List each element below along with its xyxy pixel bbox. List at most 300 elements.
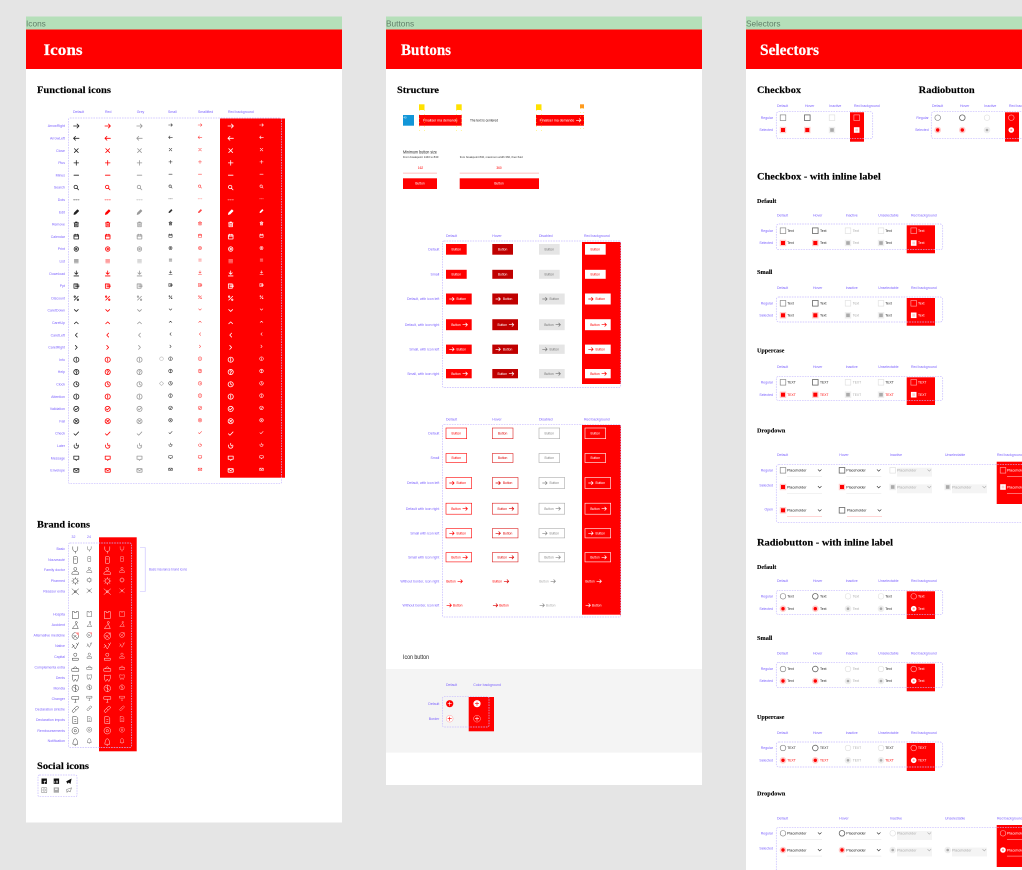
structure button: centered label — [419, 115, 462, 126]
section: radio uppercase — [757, 715, 943, 771]
brand icon column: 24 — [86, 546, 92, 743]
row: small with icon left: Button — [550, 348, 559, 352]
dashed boundary — [776, 590, 943, 615]
header band: Buttons — [386, 30, 702, 69]
red background: icon button — [469, 697, 494, 731]
row: regular: Regular — [761, 468, 774, 472]
red background — [1005, 112, 1019, 142]
panel body — [386, 69, 702, 785]
frame label bar: Buttons — [386, 16, 702, 30]
subheading: Dropdown — [757, 792, 786, 798]
column headers — [777, 214, 937, 218]
row: regular: Placeholder — [897, 469, 917, 473]
column headers: Inactive — [846, 286, 858, 290]
row: selected: Selected — [759, 484, 773, 488]
row labels: brand icons: Accident — [52, 623, 65, 627]
icon column: small — [169, 124, 172, 471]
column headers: functional icons: Red — [105, 110, 111, 114]
row labels: functional icons: Later — [57, 444, 66, 448]
row: selected: Placeholder — [952, 848, 972, 852]
row: regular: TEXT — [918, 746, 926, 750]
column headers — [777, 652, 937, 656]
row: regular: Text — [820, 594, 826, 598]
column headers: functional icons: Default — [73, 110, 84, 114]
row: selected: Placeholder — [952, 485, 972, 489]
dashed boundary: icon button — [442, 697, 489, 727]
icon: small clock variant — [159, 381, 164, 386]
row labels: brand icons — [33, 547, 66, 743]
column headers: Disabled — [539, 418, 553, 422]
padding marker: blue — [403, 115, 414, 126]
row labels: brand icons: Alternative medicine — [33, 634, 65, 638]
row: regular: Text — [820, 302, 826, 306]
column headers: Unselectable — [945, 453, 965, 457]
column headers — [777, 104, 880, 108]
row: small: Button — [452, 272, 461, 276]
row labels: brand icons: Notification — [48, 739, 65, 743]
row: small: Small — [431, 456, 440, 460]
dashed boundary — [776, 112, 873, 139]
row labels: brand icons: Hospita — [53, 612, 65, 616]
row: open: Placeholder — [787, 509, 807, 513]
row: regular: Text — [787, 667, 794, 671]
text: breakpoint note right: from breakpoint 840, maximum width 360, then fluid — [460, 155, 523, 159]
header band: Buttons: Buttons — [401, 42, 451, 59]
row: default with icon right: Default, with icon right — [405, 323, 439, 327]
row labels: functional icons: List — [60, 260, 65, 264]
column headers: Red background — [911, 731, 937, 735]
dashed boundary — [442, 241, 621, 388]
column headers: Hover — [839, 453, 849, 457]
row: selected: Placeholder — [846, 485, 867, 489]
column headers: Inactive — [846, 652, 858, 656]
red background — [907, 377, 935, 405]
row labels: icon button — [428, 702, 440, 721]
row: selected: TEXT — [918, 758, 926, 762]
row labels: functional icons — [47, 124, 66, 473]
column headers: functional icons: Smallified — [198, 110, 213, 114]
padding marker: blue: 40 — [404, 116, 407, 120]
row: selected: Placeholder — [897, 485, 917, 489]
row: without border, icon right: Button — [493, 580, 502, 584]
row: selected: Placeholder — [897, 848, 917, 852]
icon: small info variant — [160, 357, 163, 361]
row: default: Button — [545, 248, 554, 252]
row labels: brand icons: Mondia — [54, 686, 65, 690]
row: selected — [759, 312, 924, 318]
row labels: icon button: Default — [428, 702, 439, 706]
dashed boundary — [776, 662, 943, 688]
panel: buttons — [386, 16, 702, 785]
heading: Radiobutton with inline label: Radiobutton - with inline label — [757, 537, 893, 548]
column headers: Red background — [854, 104, 880, 108]
icon: send — [66, 778, 72, 784]
column headers — [777, 731, 937, 735]
row: regular: Text — [918, 302, 924, 306]
row: without border, icon left: Button — [546, 604, 556, 608]
row: selected: Text — [885, 679, 892, 683]
row labels: functional icons: Info — [59, 358, 65, 362]
icon column: default — [74, 124, 79, 472]
row labels: brand icons: Basic — [56, 547, 65, 551]
row: default: Button — [498, 248, 508, 252]
icon: social square — [54, 787, 59, 793]
row: selected: Text — [885, 607, 892, 611]
row: regular: Placeholder — [846, 469, 867, 473]
red background column — [582, 425, 621, 615]
row: default with icon right: Button — [590, 507, 600, 511]
row: default with icon left — [407, 294, 611, 304]
column headers — [446, 234, 610, 238]
row: small with icon left: Small, with icon left — [409, 348, 439, 352]
header band: Icons — [26, 30, 342, 69]
icon: bird — [67, 788, 72, 792]
row: small with icon right: Button — [590, 372, 600, 376]
column headers: Red background — [584, 418, 610, 422]
column headers — [777, 579, 937, 583]
row labels: brand icons: Réassur extra — [43, 590, 65, 594]
row: small with icon right: Button — [451, 556, 461, 560]
dashed component boundary — [68, 118, 282, 484]
row: small with icon left — [410, 529, 611, 538]
table: outlined buttons — [400, 418, 621, 617]
heading: Checkbox — [757, 85, 801, 96]
row: without border, icon right — [400, 580, 601, 584]
row labels: functional icons: Dots — [58, 198, 65, 202]
column headers: Default — [932, 104, 943, 108]
row: regular: Text — [918, 594, 924, 598]
row: selected: TEXT — [787, 393, 796, 397]
minimum size: 360: 360 — [496, 166, 502, 170]
row: selected: Selected — [759, 679, 773, 683]
column headers: Inactive — [846, 365, 858, 369]
section: radio default — [757, 565, 943, 619]
row: selected — [759, 392, 926, 398]
row: regular: Regular — [761, 594, 774, 598]
row: default with icon left: Button — [457, 481, 466, 485]
row: default with icon left: Button — [503, 481, 513, 485]
row: small with icon right: Button — [590, 556, 600, 560]
row: regular — [761, 666, 924, 672]
column headers: Default — [777, 365, 788, 369]
column headers: Hover — [492, 234, 502, 238]
column headers: Default — [777, 104, 788, 108]
column headers — [777, 816, 1022, 820]
text: breakpoint note left: From breakpoint 1440 to 840: — [403, 155, 439, 159]
bracket: basic insurance group — [140, 548, 145, 592]
column headers — [777, 286, 937, 290]
band: icon button background — [386, 669, 702, 753]
row labels: functional icons: Search — [54, 186, 65, 190]
row: selected: Selected — [915, 128, 929, 132]
row labels: functional icons: CaretUp — [52, 321, 65, 325]
row: small with icon right — [407, 369, 611, 378]
row: small — [431, 454, 606, 462]
row: selected: Text — [787, 314, 794, 318]
column headers — [777, 365, 937, 369]
row: selected: TEXT — [820, 758, 828, 762]
red background column: brand — [99, 537, 137, 751]
row labels: functional icons: Clock — [56, 382, 65, 386]
dashed boundary — [776, 742, 943, 767]
column headers — [446, 418, 610, 422]
panel: icons — [26, 16, 342, 822]
row: regular: Regular — [761, 746, 774, 750]
row: small with icon left: Button — [457, 348, 466, 352]
column headers: Default — [777, 453, 788, 457]
row: regular: Text — [853, 302, 859, 306]
row: small: Button — [591, 456, 600, 460]
row: regular: Text — [820, 667, 826, 671]
column headers: Red background — [911, 365, 937, 369]
column headers: Hover — [813, 286, 823, 290]
dashed boundary — [931, 112, 1022, 139]
subheading: Default — [757, 199, 776, 205]
row: small with icon left: Small with icon left — [410, 532, 439, 536]
section: radiobutton — [915, 85, 1022, 142]
row: small with icon right: Button — [498, 556, 507, 560]
column headers: icon button: Color background — [473, 683, 501, 687]
row: default with icon right: Button — [544, 507, 554, 511]
row: small: Button — [591, 272, 600, 276]
row: regular: TEXT — [853, 746, 861, 750]
padding markers: yellow and orange — [536, 104, 584, 131]
row: default: Default — [428, 432, 439, 436]
row: regular — [761, 594, 924, 599]
section: checkbox small — [757, 270, 943, 326]
row: selected: Selected — [759, 758, 773, 762]
row labels: functional icons: ArrowLeft — [50, 136, 65, 140]
row labels: functional icons: Calendar — [51, 235, 66, 239]
heading: Brand icons: Brand icons — [37, 519, 90, 530]
column headers: Hover — [805, 104, 815, 108]
row: default with icon right: Button — [498, 507, 507, 511]
row: selected: Placeholder — [787, 485, 807, 489]
row labels: functional icons: Print — [58, 247, 65, 251]
column headers: Inactive — [890, 816, 902, 820]
header band: Icons: Icons — [44, 42, 82, 59]
row labels: functional icons: Fail — [59, 419, 65, 423]
row: regular: TEXT — [787, 380, 796, 384]
row: default — [428, 428, 606, 439]
row: small with icon right: Button — [498, 372, 507, 376]
subheading: Uppercase — [757, 349, 785, 355]
section: checkbox dropdown — [757, 428, 1022, 523]
row labels: functional icons: Message — [51, 456, 65, 460]
row: small: Button — [498, 272, 508, 276]
column headers: Hover — [813, 365, 823, 369]
row: without border, icon right: Button — [539, 580, 549, 584]
row: regular: Text — [885, 302, 892, 306]
row: selected: Text — [787, 679, 794, 683]
row: selected — [759, 846, 1022, 856]
row: small with icon right: Small with icon right — [408, 556, 439, 560]
column headers: Red background — [997, 816, 1022, 820]
column headers: Inactive — [890, 453, 902, 457]
column headers: Hover — [813, 652, 823, 656]
panel body — [26, 69, 342, 822]
row: regular: TEXT — [918, 380, 926, 384]
row: small with icon right: Button — [451, 372, 461, 376]
structure button: centered label: Finaliser ma demande — [423, 118, 458, 122]
column headers: functional icons: Small — [168, 110, 177, 114]
row: selected: Text — [918, 679, 924, 683]
row: small with icon right: Button — [544, 372, 554, 376]
row: regular: Regular — [761, 229, 774, 233]
row: selected: Text — [918, 241, 924, 245]
row: regular: Regular — [761, 667, 774, 671]
column headers: Red background — [911, 579, 937, 583]
row: selected: Selected — [759, 607, 773, 611]
column headers: Inactive — [846, 214, 858, 218]
row: selected: Selected — [759, 846, 773, 850]
red background — [997, 462, 1022, 504]
heading: Checkbox with inline label: Checkbox - with inline label — [757, 171, 881, 182]
row: regular: Text — [885, 229, 892, 233]
row: default with icon right: Button — [451, 507, 461, 511]
header band: Selectors — [746, 30, 1022, 69]
column headers — [932, 104, 1022, 108]
dashed boundary — [776, 465, 1022, 523]
row: selected: Text — [918, 314, 924, 318]
row: open: Placeholder — [847, 509, 867, 513]
row labels: brand icons: Dents — [56, 676, 65, 680]
row labels: functional icons: Download — [49, 272, 65, 276]
brand icon column: 32 — [72, 546, 79, 745]
row: regular: Text — [853, 229, 859, 233]
row: selected: TEXT — [853, 758, 861, 762]
row: open: Open — [764, 508, 773, 512]
row: default with icon right — [406, 503, 611, 514]
icon button: default on red — [473, 700, 481, 707]
red background — [997, 825, 1022, 867]
minimum size: 360 — [460, 166, 539, 189]
icon button: default — [446, 700, 453, 707]
row: open — [764, 507, 882, 517]
row: regular: Text — [885, 667, 892, 671]
row labels: brand icons: Declaration sinistre — [35, 708, 65, 712]
frame label bar: Selectors — [746, 16, 1022, 30]
row: selected: Text — [820, 607, 826, 611]
row: default: Button — [452, 432, 461, 436]
row labels: functional icons: CaretLeft — [51, 333, 65, 337]
row labels: brand icons: Capital — [54, 655, 65, 659]
column headers: Hover — [960, 104, 970, 108]
panel body — [746, 69, 1022, 870]
heading: Radiobutton — [919, 85, 975, 96]
row: regular: Text — [787, 594, 794, 598]
dashed boundary — [442, 424, 621, 617]
row labels: functional icons: Discount — [51, 296, 65, 300]
row: regular: Text — [787, 229, 794, 233]
column headers: Hover — [492, 418, 502, 422]
row: without border, icon left — [403, 604, 602, 608]
row: regular: Placeholder — [846, 832, 867, 836]
row: default: Button — [498, 432, 508, 436]
column headers: icon button: Default — [446, 683, 457, 687]
icon: linkedin — [54, 778, 59, 784]
row labels: functional icons: Validation — [50, 407, 65, 411]
section: radio small — [757, 636, 943, 691]
row: selected — [759, 678, 924, 684]
row: selected: TEXT — [885, 393, 894, 397]
row: small with icon right — [408, 553, 611, 562]
column headers: Unselectable — [878, 652, 899, 656]
row: selected — [759, 757, 926, 764]
icon button: border — [446, 715, 453, 722]
dashed boundary: social icons — [38, 775, 77, 797]
row: small: Button — [452, 456, 461, 460]
padding markers: yellow pair — [419, 104, 462, 131]
row labels: brand icons: Declaration impots — [36, 718, 65, 722]
column headers: Inactive — [984, 104, 996, 108]
row labels: functional icons: ArrowRight — [48, 124, 65, 128]
icon: facebook — [42, 778, 47, 784]
row: selected: Text — [853, 679, 859, 683]
row: selected: Placeholder — [787, 848, 807, 852]
icon column: red — [105, 124, 110, 472]
row: selected: Text — [787, 241, 794, 245]
red background — [907, 664, 935, 691]
column headers: Red background — [911, 286, 937, 290]
column headers: Default — [777, 652, 788, 656]
row labels: functional icons: CaretDown — [47, 309, 65, 313]
row: default — [428, 244, 606, 255]
column headers: functional icons: Red background — [228, 110, 254, 114]
row: regular: Text — [918, 667, 924, 671]
column headers: Hover — [813, 214, 823, 218]
row: small: Small — [431, 272, 440, 276]
table: filled buttons — [405, 234, 621, 388]
row: regular: Text — [853, 594, 859, 598]
section: radio dropdown — [757, 792, 1022, 870]
frame label bar: Buttons: Buttons — [386, 19, 414, 29]
row: regular — [761, 380, 926, 385]
heading: Functional icons: Functional icons — [37, 85, 111, 96]
minimum size: 162 — [403, 166, 437, 189]
column headers: Unselectable — [878, 214, 899, 218]
column headers: Hover — [839, 816, 849, 820]
column headers: brand icons: 24 — [87, 535, 91, 539]
row: default with icon left: Default, with icon left — [407, 297, 439, 301]
panel: selectors — [746, 16, 1022, 870]
column headers: Unselectable — [878, 365, 899, 369]
row labels: functional icons: CaretRight — [48, 346, 65, 350]
row: default with icon left: Button — [457, 297, 466, 301]
row: small with icon left — [409, 345, 611, 354]
row: default with icon right: Button — [451, 323, 461, 327]
row labels: functional icons: Plus — [58, 161, 65, 165]
row: regular — [761, 300, 924, 306]
icon column: white on red — [228, 124, 233, 472]
column headers: Red background — [997, 453, 1022, 457]
section: checkbox uppercase — [757, 349, 943, 405]
row: selected: TEXT — [853, 393, 861, 397]
row: selected: Selected — [759, 241, 773, 245]
subheading: Uppercase — [757, 715, 785, 721]
row: default: Button — [591, 432, 600, 436]
row: without border, icon left: Button — [592, 604, 602, 608]
dashed boundary — [776, 376, 943, 401]
icon column: small white on red — [260, 124, 263, 471]
minimum size: 162: Button — [415, 182, 425, 186]
row: regular: Placeholder — [787, 832, 807, 836]
row: default with icon left — [407, 478, 611, 488]
row labels: brand icons: Native — [55, 644, 65, 648]
note: text is centered: The text is centered — [470, 118, 498, 122]
row: selected: Text — [918, 607, 924, 611]
row: regular: Text — [853, 667, 859, 671]
